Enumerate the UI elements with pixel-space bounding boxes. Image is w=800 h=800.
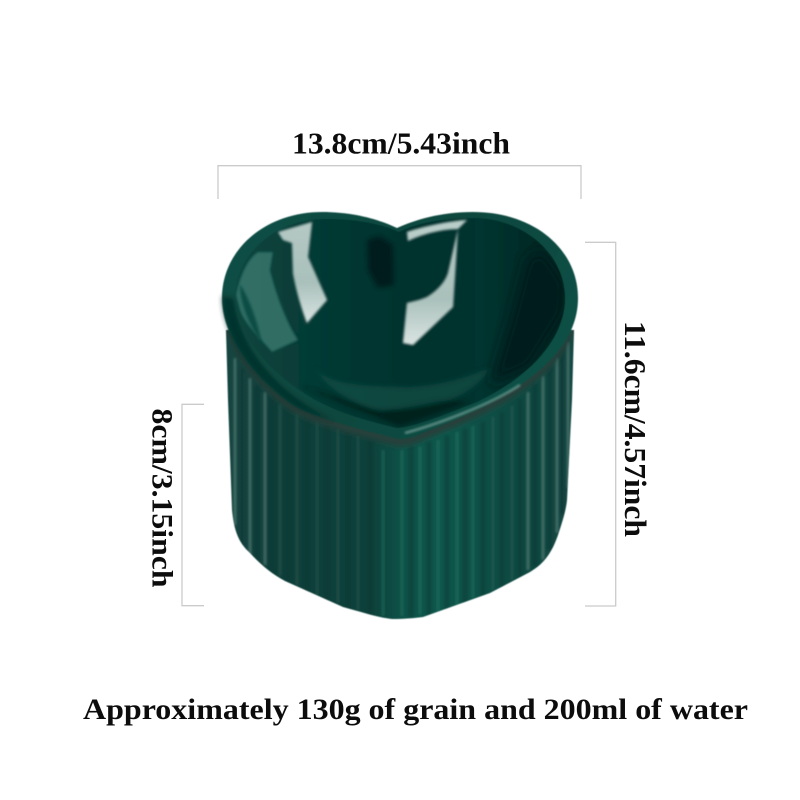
rim shadow on body [226,330,573,450]
capacity caption: Approximately 130g of grain and 200ml of water [83,693,748,726]
center highlight [403,229,458,345]
left dark swirl [240,285,262,345]
dimension: top width [218,126,581,199]
lower bowl dark [316,390,463,427]
inner bowl reflections [236,220,565,426]
left bracket [182,404,204,606]
bowl body [226,330,574,619]
body ribs [226,330,573,618]
left label: 8cm/3.15inch [146,408,178,588]
heart rim [222,212,578,439]
right bracket [585,242,616,606]
left highlight [278,222,327,323]
dimension: bowl height [146,404,204,606]
right label: 11.6cm/4.57inch [618,321,653,537]
rim left shade [222,296,335,421]
rim lower glint [405,385,520,433]
center top streak [407,220,467,241]
dimension: total height [585,242,653,606]
top label: 13.8cm/5.43inch [292,126,510,160]
heart inner [235,218,565,428]
right dark shadow [490,250,565,385]
center dark reflection [367,236,394,288]
top bracket [218,166,581,199]
left pale reflection [236,252,298,352]
bowl [222,212,578,619]
bottom reflection [313,367,490,410]
